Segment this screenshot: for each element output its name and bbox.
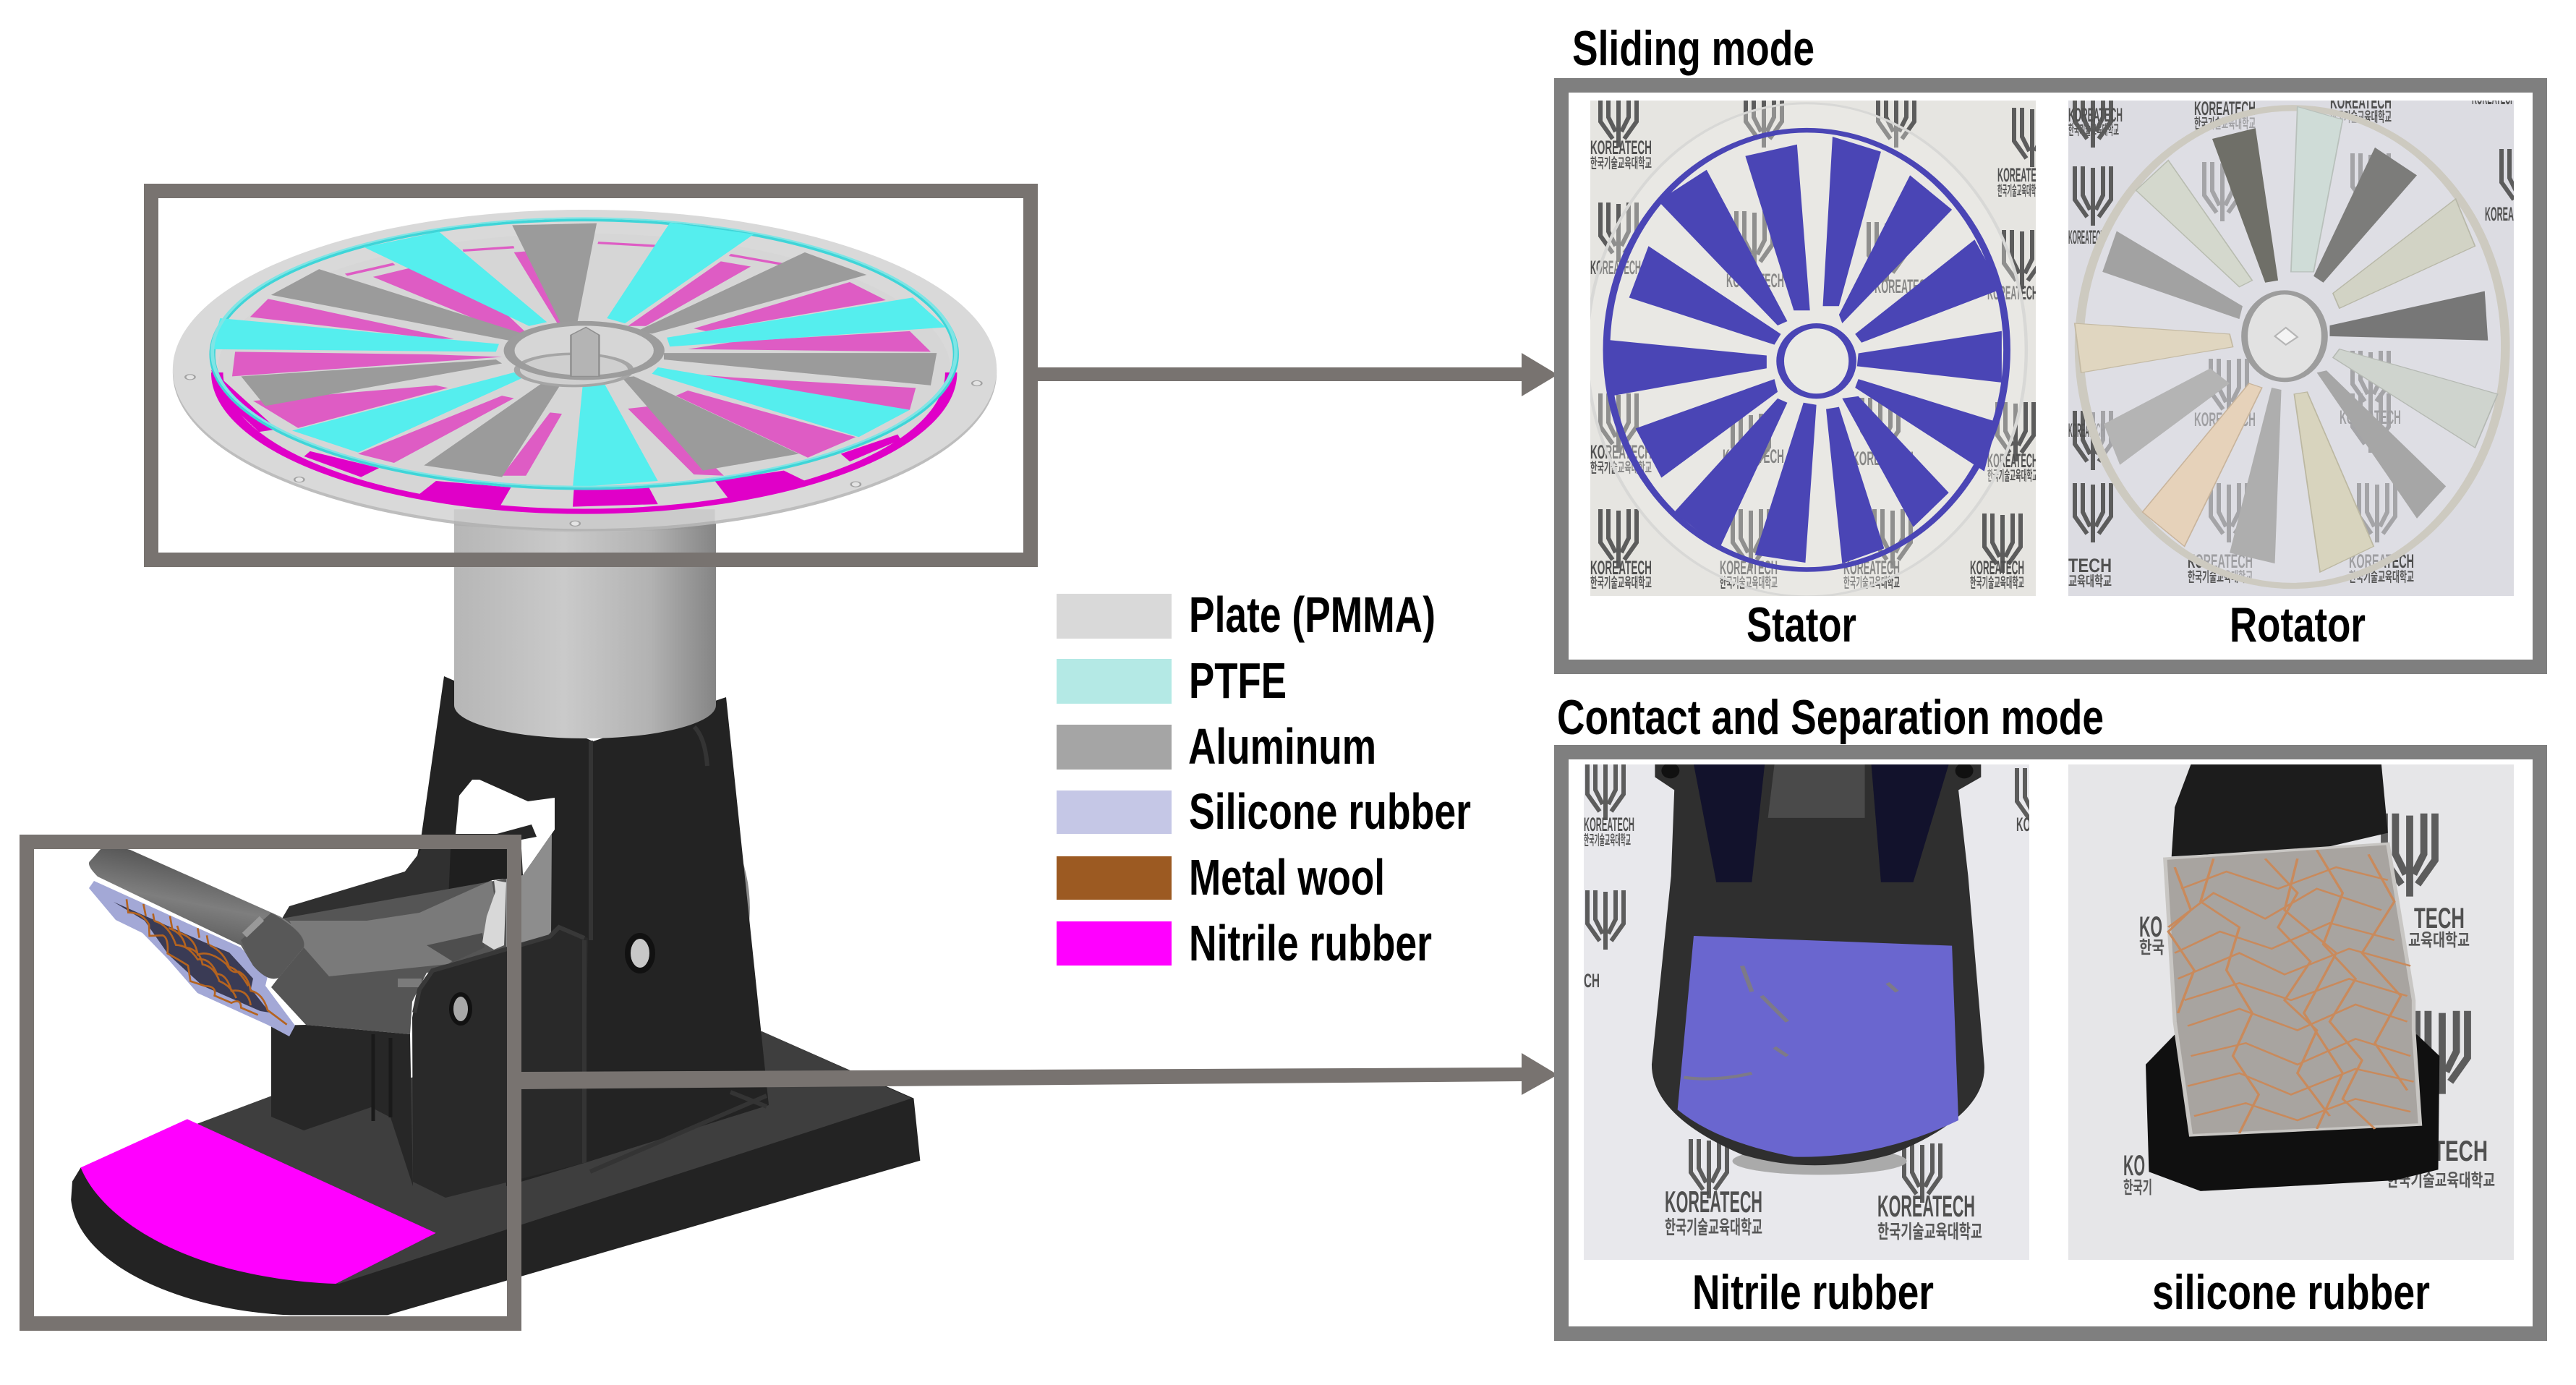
tower body (405, 676, 769, 1186)
watermark text: 한국기술교육대학교 (1877, 1221, 1982, 1243)
photo: rotator (2068, 87, 2538, 596)
photo: stator: KOREATECH (1987, 282, 2038, 304)
pillar slit (373, 1034, 391, 1121)
watermark text: 교육대학교 (2408, 931, 2470, 950)
watermark text: KOREATECH (2068, 104, 2123, 126)
handle cap (241, 913, 304, 979)
watermark text: 한국기술교육대학교 (2330, 109, 2392, 125)
tower hole (628, 936, 652, 971)
hub (2245, 292, 2324, 380)
label: nitrile rubber: Nitrile rubber (1692, 1265, 1934, 1320)
watermark text: 한국기술교육대학교 (1590, 460, 1652, 476)
black base (1652, 764, 1984, 1165)
top ear bolts (1661, 763, 1974, 778)
rear arm (282, 848, 506, 921)
arm hole (451, 994, 470, 1023)
blue ring (1606, 130, 2007, 569)
watermark text: KOREATECH (2068, 419, 2104, 441)
watermark text: KOREATECH (1584, 814, 1634, 835)
watermark text: 한국기술교육대학교 (1665, 1216, 1762, 1238)
square shaft hole (2275, 328, 2298, 345)
label: PTFE: PTFE (1189, 652, 1287, 709)
cradle notch (398, 979, 422, 987)
watermark text: KOREATECH (1720, 557, 1778, 579)
cylinder seen through plate (454, 509, 715, 531)
top black tape (2172, 764, 2388, 856)
hub ring (509, 323, 659, 378)
watermark text: 한국기술교육대학교 (1970, 575, 2024, 591)
base top surface (81, 1031, 912, 1284)
watermark text: 한국기술교육대학교 (2349, 569, 2414, 585)
device body and rubber (1652, 763, 1984, 1175)
watermark text: KOREATECH (1726, 270, 1784, 291)
arrow: disc to sliding mode (1036, 353, 1558, 396)
outer PMMA plate rim (173, 213, 997, 532)
watermark text: 한국 (2139, 938, 2165, 958)
stator upper ring arcs (346, 243, 784, 275)
watermark text: 한국기술교육대학교 (1584, 832, 1631, 848)
outer PMMA plate (173, 210, 997, 529)
label: plate: Plate (PMMA) (1189, 587, 1436, 643)
photo: silicone rubber (2068, 764, 2514, 1260)
label: aluminum: Aluminum (1188, 718, 1376, 775)
nitrile rubber sheet (1678, 936, 1958, 1157)
watermark text: KOREATECH (1970, 557, 2024, 579)
stator disc with blue rubber blades (1587, 103, 2026, 597)
watermark text: KOREATECH (1843, 557, 1900, 579)
watermark logos (1600, 88, 2050, 573)
heading: contact and separation mode: Contact and Separation mode (1557, 690, 2104, 745)
nitrile ring lower arc (217, 372, 951, 511)
watermark text: KOREATECH (2340, 406, 2401, 428)
photo: stator: KOREATECH (1987, 450, 2038, 472)
watermark text: 한국기술교육대학교 (2188, 569, 2253, 585)
sliding disc assembly (173, 210, 997, 532)
cradle upper face (289, 880, 499, 976)
watermark text: TECH (2414, 903, 2465, 934)
metal wool mesh (127, 899, 287, 1025)
label: silicone rubber: silicone rubber (2152, 1265, 2430, 1320)
watermark text: 한국기술교육대학교 (1590, 575, 1652, 591)
watermark text: KOREATECH (2194, 98, 2256, 119)
swatch: metal wool (1057, 856, 1172, 900)
watermark text: KOREATECH (2349, 550, 2414, 572)
legend (1057, 587, 1471, 971)
internal gear disc (506, 834, 552, 947)
handle bar (89, 847, 304, 979)
PTFE disc rim (213, 220, 956, 489)
watermark text: TECH (2433, 1135, 2488, 1167)
watermark logos (2384, 814, 2468, 1094)
base plate (71, 1031, 920, 1315)
swatch: plate (1057, 594, 1172, 639)
copper wool (2168, 850, 2414, 1133)
clear plate (1587, 103, 2026, 597)
text: KOREATECH (1997, 164, 2048, 186)
gear teeth (482, 880, 506, 950)
watermark text: 한국기술교육대학교 (2194, 116, 2256, 132)
watermark text: KOREATECH (1852, 448, 1914, 469)
watermark text: KO (2123, 1150, 2145, 1182)
hub lower bearing (517, 354, 631, 386)
lower ring blocks (211, 370, 901, 508)
swatch: aluminum (1057, 725, 1172, 770)
label: stator: Stator (1747, 597, 1856, 652)
plate ring (2079, 108, 2505, 586)
navy side bars (1694, 764, 1949, 882)
watermark text (2123, 903, 2495, 1198)
center shaft (571, 327, 599, 376)
pillar top highlight (414, 927, 584, 1013)
photo: stator (1587, 88, 2050, 597)
cradle backing (271, 879, 506, 1034)
watermark text: 한국기술교육대학교 (1843, 575, 1900, 591)
PTFE blades (2291, 107, 2342, 272)
watermark text: KOREATECH (2188, 550, 2253, 572)
blue hub ring (1780, 326, 1853, 396)
heading: sliding mode: Sliding mode (1572, 21, 1814, 76)
tower edge highlight (584, 727, 767, 1172)
watermark text: KO (2139, 911, 2162, 943)
watermark text: KOREATECH (2194, 409, 2256, 430)
swatch: silicone rubber (1057, 790, 1172, 834)
tower and cradle (271, 676, 769, 1198)
bottom highlight frame (27, 842, 514, 1324)
watermark text: 한국기술교육대학교 (2068, 122, 2119, 138)
watermark text: KOREATECH (1590, 441, 1652, 463)
watermark text: KOREATECH (1665, 1185, 1762, 1219)
plate screws (185, 375, 981, 526)
photo: rotator: KOREA (2485, 203, 2514, 225)
arrow: pad to contact-separation mode (521, 1053, 1558, 1095)
top highlight frame (151, 191, 1031, 560)
watermark text: 교육대학교 (2068, 574, 2112, 589)
silicone sheet (2165, 843, 2420, 1135)
PTFE blades (211, 223, 946, 487)
swatch: nitrile rubber (1057, 921, 1172, 966)
window internal fragment (497, 824, 537, 843)
silicone sample with metal wool (2146, 764, 2439, 1191)
rear mount (1768, 764, 1865, 818)
aluminum blades (241, 223, 937, 477)
stator plate area (217, 234, 951, 511)
nitrile rubber pad (81, 1119, 436, 1284)
stator blades seen through the disc (232, 251, 931, 476)
watermark text: TECH (2068, 555, 2112, 576)
panel: contact and separation frame (1561, 752, 2540, 1334)
watermark logos (2075, 88, 2538, 542)
3D model of the device (71, 210, 997, 1315)
label: rotator: Rotator (2230, 597, 2366, 652)
photo: nitrile rubber: KO (2016, 814, 2031, 835)
tower window (456, 780, 555, 875)
watermark text: 한국기술교육대학교 (1590, 155, 1652, 171)
cradle shadow wedge (427, 933, 485, 962)
watermark text (1590, 137, 2048, 591)
watermark text: 한국기술교육대학교 (1720, 575, 1778, 591)
right arm pillar (412, 926, 588, 1198)
watermark text: 한국기술교육대학교 (1987, 468, 2038, 484)
PTFE disc top edge (213, 218, 956, 487)
rear arm shadow (448, 848, 506, 900)
watermark logos (1587, 761, 2053, 1203)
watermark text: KOREATECH (1875, 276, 1932, 297)
watermark text: KOREATECH (2068, 226, 2104, 248)
left pillar (271, 1025, 413, 1186)
wear marks (1684, 966, 1897, 1079)
handle tip highlight (244, 919, 262, 935)
silicone electrode with wool (89, 847, 304, 1036)
base plate and pad (71, 831, 920, 1315)
watermark text (1584, 814, 2031, 1243)
photo: nitrile rubber (1584, 761, 2053, 1260)
label: metal wool: Metal wool (1189, 849, 1385, 905)
text: 한국기술교육대학교 (1997, 183, 2041, 199)
watermark text: KOREATECH (1590, 557, 1652, 579)
label: silicone rubber: Silicone rubber (1189, 783, 1471, 840)
watermark text: KOREATECH (1590, 257, 1641, 278)
swatch: PTFE (1057, 659, 1172, 704)
watermark text: KOREATECH (2330, 91, 2392, 113)
support cylinder (454, 499, 716, 738)
watermark text: 한국기술교육대학교 (2387, 1171, 2495, 1190)
silicone rubber sheet (89, 881, 295, 1036)
rear gray disc (730, 831, 750, 955)
watermark text: KOREATECH (1877, 1189, 1975, 1223)
bottom black tape (2146, 1034, 2439, 1191)
watermark text: 한국기 (2123, 1178, 2152, 1198)
silver disc edge (1733, 1154, 1907, 1175)
blue blades (1605, 137, 2002, 563)
watermark text: KOREATECH (1723, 446, 1784, 467)
dark electrode surface (114, 902, 270, 1013)
label: nitrile rubber: Nitrile rubber (1189, 915, 1432, 971)
watermark text: KOREATECH (1590, 137, 1652, 158)
rotator disc with PTFE and aluminum blades (2075, 107, 2505, 586)
aluminum blades (2212, 128, 2278, 283)
watermark text (2068, 87, 2515, 589)
panel: sliding mode frame (1561, 85, 2540, 667)
watermark text: CH (1584, 970, 1600, 992)
